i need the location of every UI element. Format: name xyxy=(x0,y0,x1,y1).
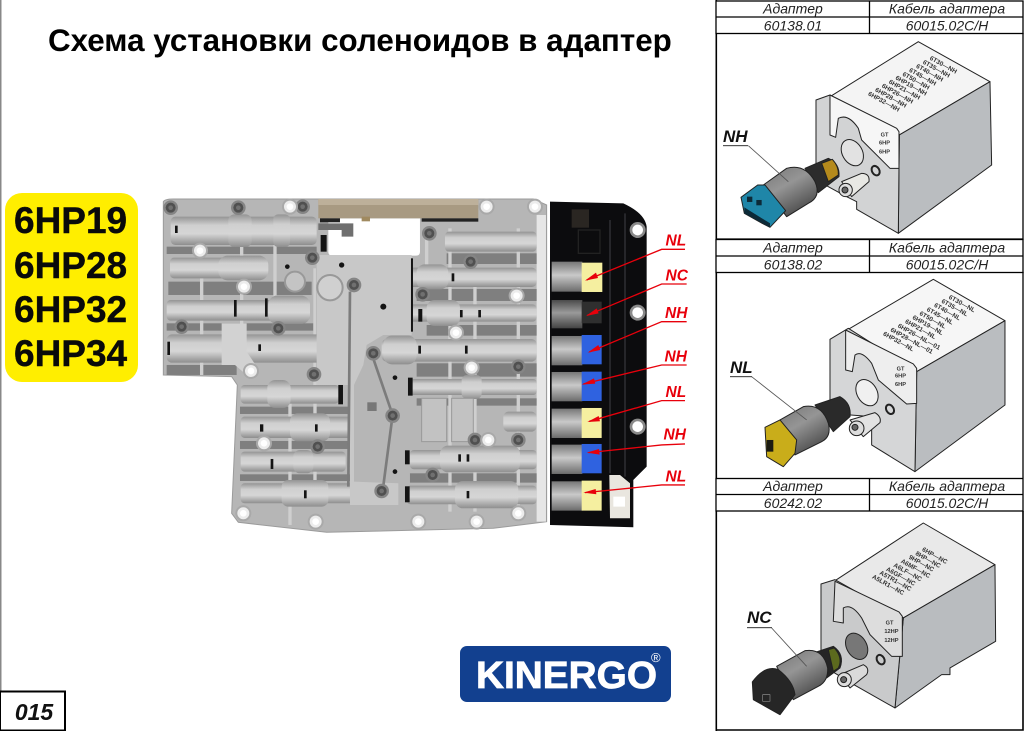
black slots xyxy=(167,226,481,502)
plate markings: GT xyxy=(897,367,905,373)
spec table xyxy=(716,240,1023,272)
model list xyxy=(14,200,128,374)
model list: 6HP28 xyxy=(14,245,127,286)
red callout arrows xyxy=(582,249,687,494)
dark bolts xyxy=(163,199,526,498)
top label text: A6MF—NC xyxy=(899,558,932,580)
control board xyxy=(550,202,647,527)
leader xyxy=(752,377,807,420)
registered mark: ® xyxy=(651,650,661,665)
solenoid label NC: NC xyxy=(747,608,772,627)
plate markings: 6HP xyxy=(895,382,906,388)
spec table: Кабель адаптера xyxy=(889,0,1005,16)
spec table: 60138.01 xyxy=(764,18,822,34)
column divider xyxy=(716,0,717,731)
top label text xyxy=(882,294,976,356)
top label text: 6T45—NH xyxy=(908,67,938,88)
adapter illustration xyxy=(741,42,992,233)
solenoid NL xyxy=(765,397,850,467)
top label text: 6HP21—NL xyxy=(904,318,937,341)
light bolts xyxy=(192,199,543,530)
top label text: 6HP32—NL xyxy=(882,331,915,353)
callout labels: NH xyxy=(664,426,687,444)
spec table: 60242.02 xyxy=(764,495,822,511)
plate markings: 6HP xyxy=(879,149,890,155)
spool channels xyxy=(167,247,537,483)
top label text: A6LF—NC xyxy=(892,562,923,583)
top label text: A5LR1—NC xyxy=(871,574,906,597)
mounting plate xyxy=(833,581,902,656)
top label text: 6T50—NL xyxy=(918,310,947,331)
tan bar xyxy=(318,199,478,237)
top label text: A6GF—NC xyxy=(885,566,917,588)
right frame segments xyxy=(716,33,1023,478)
top label text: 6HP—NC xyxy=(921,546,949,566)
spec table: 60015.02C/H xyxy=(906,256,989,272)
top label text: 6HP28—NH xyxy=(874,87,908,110)
top label text: 6HP21—NH xyxy=(887,79,922,102)
solenoid NC xyxy=(752,646,841,715)
logo: KINERGO xyxy=(460,646,671,702)
adapter illustration xyxy=(752,523,996,715)
callout labels: NL xyxy=(666,384,686,401)
model list: 6HP19 xyxy=(14,200,127,241)
block xyxy=(821,523,996,708)
top label text: 6HP26—NH xyxy=(880,83,915,106)
solenoid label NL: NL xyxy=(730,358,753,377)
top label text: 8HP—NC xyxy=(914,550,942,570)
plate markings: 6HP xyxy=(895,374,906,380)
panel: adapter 60138.01 xyxy=(716,0,1023,233)
solenoid NH xyxy=(741,158,839,227)
spec table: 60015.02C/H xyxy=(906,18,989,34)
leader xyxy=(772,628,807,666)
spec table: Адаптер xyxy=(762,0,823,16)
panel: transmission models badge xyxy=(5,193,138,382)
spec table: Адаптер xyxy=(762,478,823,494)
plate markings: 12HP xyxy=(884,638,899,644)
panel frame xyxy=(716,511,1023,730)
spec table: Адаптер xyxy=(762,240,823,256)
spec table xyxy=(716,0,1023,34)
logo: KINERGO: KINERGO xyxy=(476,655,657,697)
web lines xyxy=(200,228,520,525)
central plate xyxy=(222,255,473,505)
title: Схема установки соленоидов в адаптер xyxy=(48,23,672,58)
top label text: 6T35—NH xyxy=(921,59,951,80)
block xyxy=(830,279,1005,472)
top label text: 6T40—NH xyxy=(915,63,945,84)
right spools xyxy=(382,232,537,508)
block xyxy=(816,42,992,233)
plate markings: GT xyxy=(881,133,889,139)
callout labels: NL xyxy=(666,232,686,250)
notch xyxy=(328,218,420,256)
top label text: 6T30—NH xyxy=(928,55,958,76)
plate markings: 12HP xyxy=(884,629,899,635)
top label text: 6T45—NL xyxy=(925,306,954,327)
panel: adapter 60242.02 xyxy=(716,478,1023,730)
callout labels: NH xyxy=(665,305,688,322)
solenoids xyxy=(552,262,602,511)
plate markings: 6HP xyxy=(879,140,890,146)
spec table: Кабель адаптера xyxy=(889,240,1005,256)
top label text: 6T35—NL xyxy=(940,298,969,318)
callout labels: NL xyxy=(666,468,686,486)
top label text: 6T40—NL xyxy=(933,302,962,322)
top label text: 6T50—NH xyxy=(901,71,931,92)
spec table: 60015.02C/H xyxy=(906,495,989,511)
top label text xyxy=(871,546,949,597)
bore and bolt xyxy=(849,376,896,437)
spec table: 60138.02 xyxy=(764,256,822,272)
valve body illustration xyxy=(163,199,547,532)
spec table xyxy=(716,478,1023,511)
model list: 6HP34 xyxy=(14,333,128,374)
adapter illustration xyxy=(752,279,1005,472)
panel: adapter 60138.02 xyxy=(716,240,1023,472)
top label text: 6HP26—NL—01 xyxy=(896,323,942,352)
solenoid label NH: NH xyxy=(723,127,748,146)
leader xyxy=(748,146,788,182)
bore and bolt xyxy=(837,136,881,197)
plate markings: GT xyxy=(886,621,894,627)
callout labels xyxy=(664,232,689,486)
page number box xyxy=(0,692,65,730)
spec table: Кабель адаптера xyxy=(889,478,1005,494)
top label text: 6HP28—NL—01 xyxy=(889,327,934,356)
top label text: 6HP19—NH xyxy=(894,75,928,98)
mounting plate xyxy=(846,330,917,404)
mounting plate xyxy=(830,95,899,168)
top label text: 9HP—NC xyxy=(907,554,935,574)
callout labels: NC xyxy=(666,268,689,284)
bore and bolt xyxy=(837,629,886,688)
plate markings xyxy=(879,133,890,155)
top label text: 6T30—NL xyxy=(947,294,976,314)
plate markings xyxy=(895,367,906,388)
solenoid board with callouts xyxy=(550,202,689,527)
top label text: A5TR1—NC xyxy=(878,570,913,593)
top label text: 6HP19—NL xyxy=(911,314,944,337)
top label text xyxy=(867,55,958,114)
callout labels: NH xyxy=(664,348,688,366)
left spools xyxy=(167,214,367,507)
page number box: 015 xyxy=(15,699,54,725)
plate markings xyxy=(884,621,899,644)
model list: 6HP32 xyxy=(14,289,127,330)
top label text: 6HP32—NH xyxy=(867,91,901,114)
